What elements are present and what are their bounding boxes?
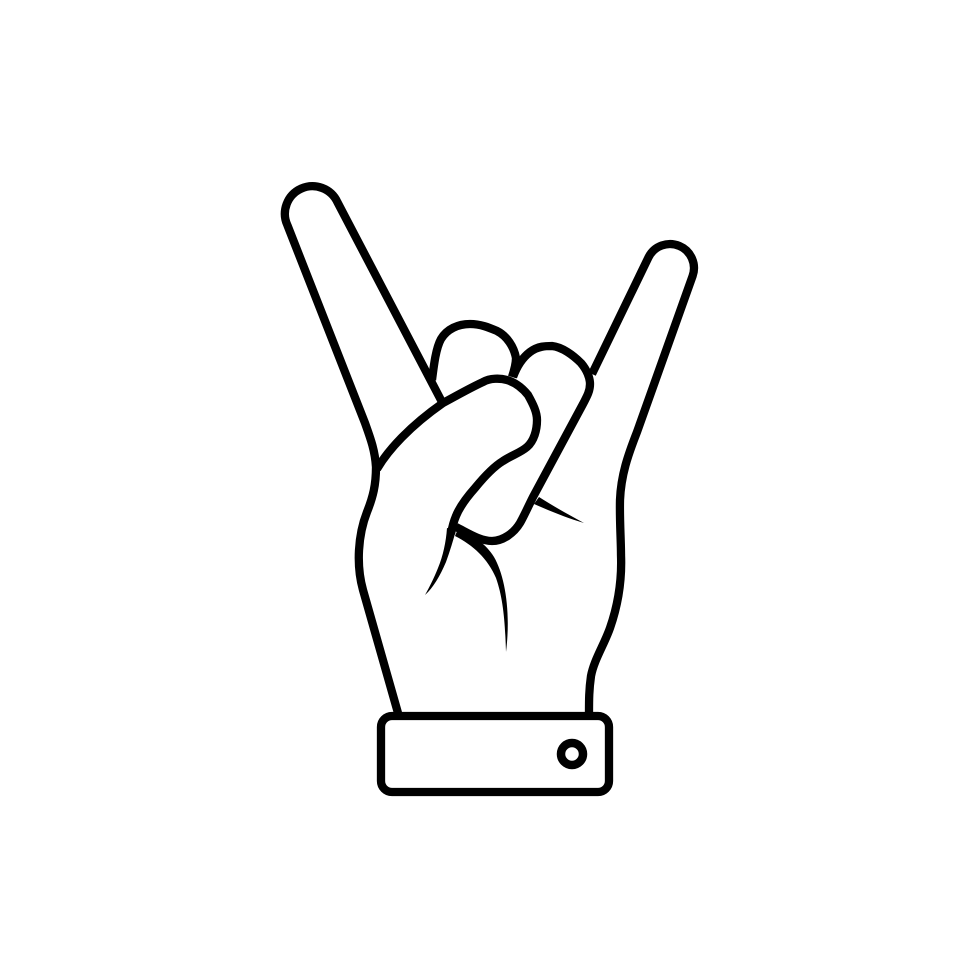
curled second finger [456,346,590,541]
palm crease lines [425,497,584,652]
curled finger top [432,324,516,380]
right crease [534,497,584,523]
cuff band [381,716,609,792]
thumb crease [425,528,456,595]
thumb [377,379,537,534]
cuff button [561,743,583,765]
center crease [455,529,508,652]
shirt cuff [381,716,609,792]
right finger and palm edge [589,244,694,713]
left finger and palm edge [285,186,442,713]
